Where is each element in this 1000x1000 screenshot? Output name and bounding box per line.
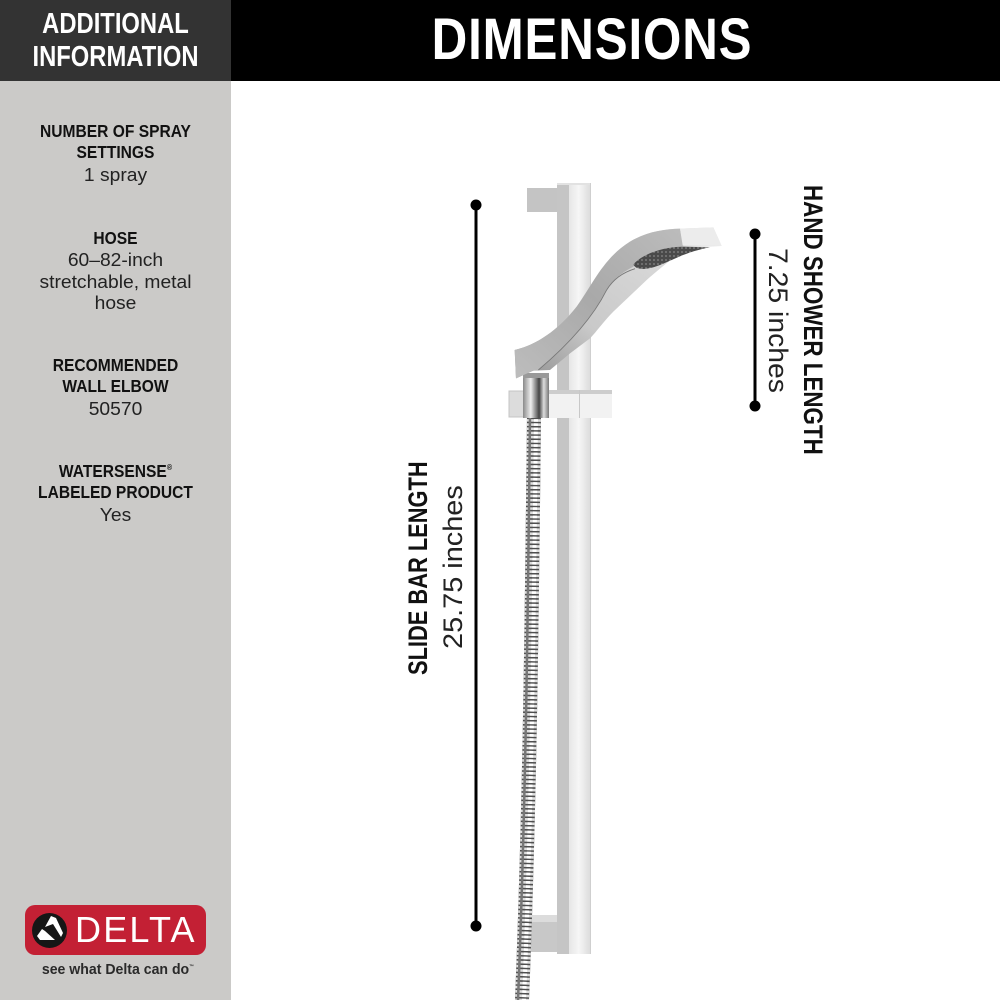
wall mount bracket xyxy=(509,373,612,418)
spec: hose: HOSE xyxy=(93,228,138,248)
flexible hose xyxy=(518,415,536,1000)
spec: spray settings xyxy=(40,121,191,185)
spec: wall elbow: WALL ELBOW xyxy=(62,376,169,396)
logo wordmark: DELTA xyxy=(75,909,197,950)
slide bar xyxy=(527,183,591,954)
title banner: DIMENSIONS xyxy=(432,7,752,72)
spec: wall elbow xyxy=(53,355,178,419)
spec: hose: stretchable, metal xyxy=(39,272,192,292)
spec: spray settings: SETTINGS xyxy=(77,142,154,162)
label: hand shower length: HAND SHOWER LENGTH xyxy=(798,185,827,455)
label: slide bar length: SLIDE BAR LENGTH xyxy=(404,461,434,675)
spec: watersense: Yes xyxy=(100,505,131,525)
spec: watersense xyxy=(38,461,193,525)
spec: hose: hose xyxy=(95,293,136,313)
dimension line: hand shower xyxy=(750,228,760,412)
logo tagline: see what Delta can do™ xyxy=(41,961,194,978)
spec: spray settings: NUMBER OF SPRAY xyxy=(40,121,191,141)
spec: watersense: LABELED PRODUCT xyxy=(38,482,193,502)
delta logo xyxy=(25,905,206,955)
title banner xyxy=(231,0,1000,81)
sidebar heading xyxy=(0,0,231,81)
dimension line: slide bar xyxy=(470,200,482,932)
spec: spray settings: 1 spray xyxy=(84,165,147,185)
sidebar panel xyxy=(0,81,231,1000)
value: slide bar length: 25.75 inches xyxy=(438,485,468,649)
spec: hose xyxy=(39,228,192,313)
spec: hose: 60–82-inch xyxy=(68,250,163,270)
spec: wall elbow: RECOMMENDED xyxy=(53,355,178,375)
hand shower xyxy=(515,227,722,378)
sidebar heading: ADDITIONAL xyxy=(42,8,189,40)
icon: delta mark xyxy=(32,913,67,948)
sidebar heading: INFORMATION xyxy=(33,41,198,73)
spec: wall elbow: 50570 xyxy=(89,399,142,419)
spec: watersense: WATERSENSE® xyxy=(59,461,172,481)
value: hand shower length: 7.25 inches xyxy=(763,248,793,393)
